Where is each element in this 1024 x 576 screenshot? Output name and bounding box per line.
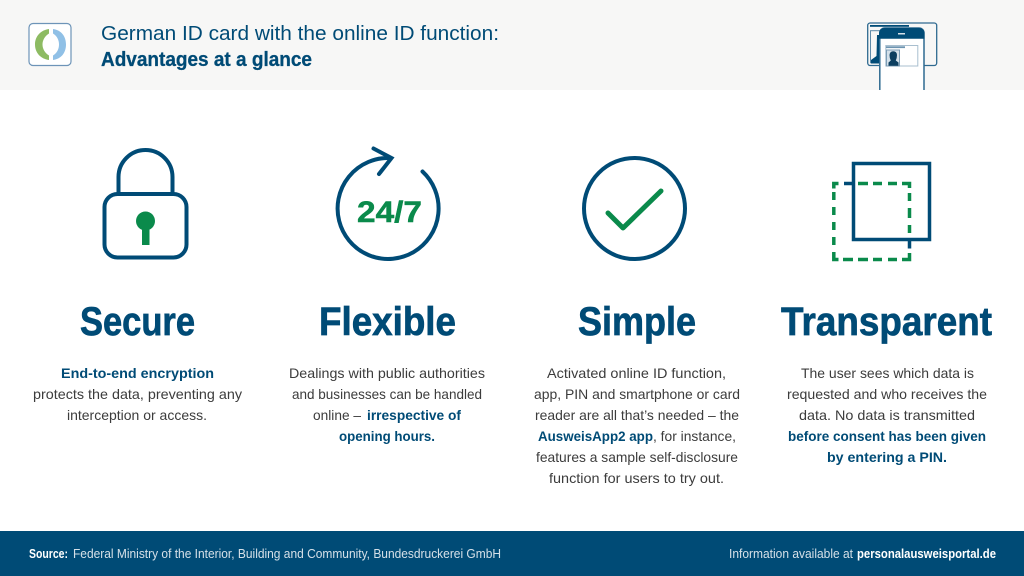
information link — [729, 547, 996, 561]
source note: Federal Ministry of the Interior, Building and Community, Bundesdruckerei GmbH — [73, 547, 501, 561]
heading: Flexible: Flexible — [319, 300, 456, 344]
panel: flexible — [289, 148, 485, 444]
text: simple description: reader are all that’s needed – the — [535, 407, 739, 423]
text: secure description: protects the data, preventing any — [33, 386, 242, 402]
text: simple description: Activated online ID function, — [547, 365, 726, 381]
icon: check mark in circle — [584, 158, 685, 259]
heading: Secure: Secure — [80, 300, 195, 344]
text: secure description: interception or access. — [67, 407, 207, 423]
panel: transparent — [781, 164, 992, 465]
header band — [0, 0, 1024, 90]
text: flexible description: opening hours. — [339, 428, 435, 444]
text: flexible description: online – — [313, 407, 361, 423]
panel: simple — [534, 158, 740, 486]
text: flexible description: and businesses can be handled — [292, 386, 482, 402]
text: simple description: , for instance, — [653, 428, 736, 444]
text: simple description — [534, 365, 740, 486]
icon: logo — [29, 24, 71, 66]
icon: padlock — [104, 150, 186, 258]
heading: Transparent: Transparent — [781, 300, 992, 344]
text: secure description: End-to-end encryption — [61, 365, 214, 381]
heading: Simple: Simple — [578, 300, 696, 344]
icon: overlapping solid and dashed squares — [834, 164, 930, 260]
text: simple description: app, PIN and smartphone or card — [534, 386, 740, 402]
text: flexible description — [289, 365, 485, 444]
icon: 24/7 circular arrow — [338, 148, 439, 259]
text: transparent description: requested and who receives the — [787, 386, 987, 402]
text: flexible description: Dealings with public authorities — [289, 365, 485, 381]
text: transparent description — [787, 365, 987, 465]
text: transparent description: data. No data is transmitted — [799, 407, 975, 423]
text: simple description: AusweisApp2 app — [538, 428, 653, 444]
source note: Source: — [29, 547, 68, 561]
text: transparent description: The user sees which data is — [801, 365, 974, 381]
icon: ID card and smartphone — [868, 23, 937, 90]
icon: 24/7 circular arrow: 24/7 — [357, 196, 422, 229]
text: simple description: function for users to try out. — [549, 470, 724, 486]
text: transparent description: by entering a PIN. — [827, 449, 947, 465]
information link: personalausweisportal.de — [857, 547, 996, 561]
footer band — [0, 531, 1024, 576]
text: simple description: features a sample self-disclosure — [536, 449, 738, 465]
text: flexible description: irrespective of — [367, 407, 461, 423]
text: transparent description: before consent has been given — [788, 428, 986, 444]
title: German ID card with the online ID function: — [101, 23, 499, 45]
title — [101, 23, 499, 71]
panel: secure — [33, 150, 242, 423]
information link: Information available at — [729, 547, 853, 561]
text: secure description — [33, 365, 242, 423]
title: Advantages at a glance — [101, 49, 312, 71]
